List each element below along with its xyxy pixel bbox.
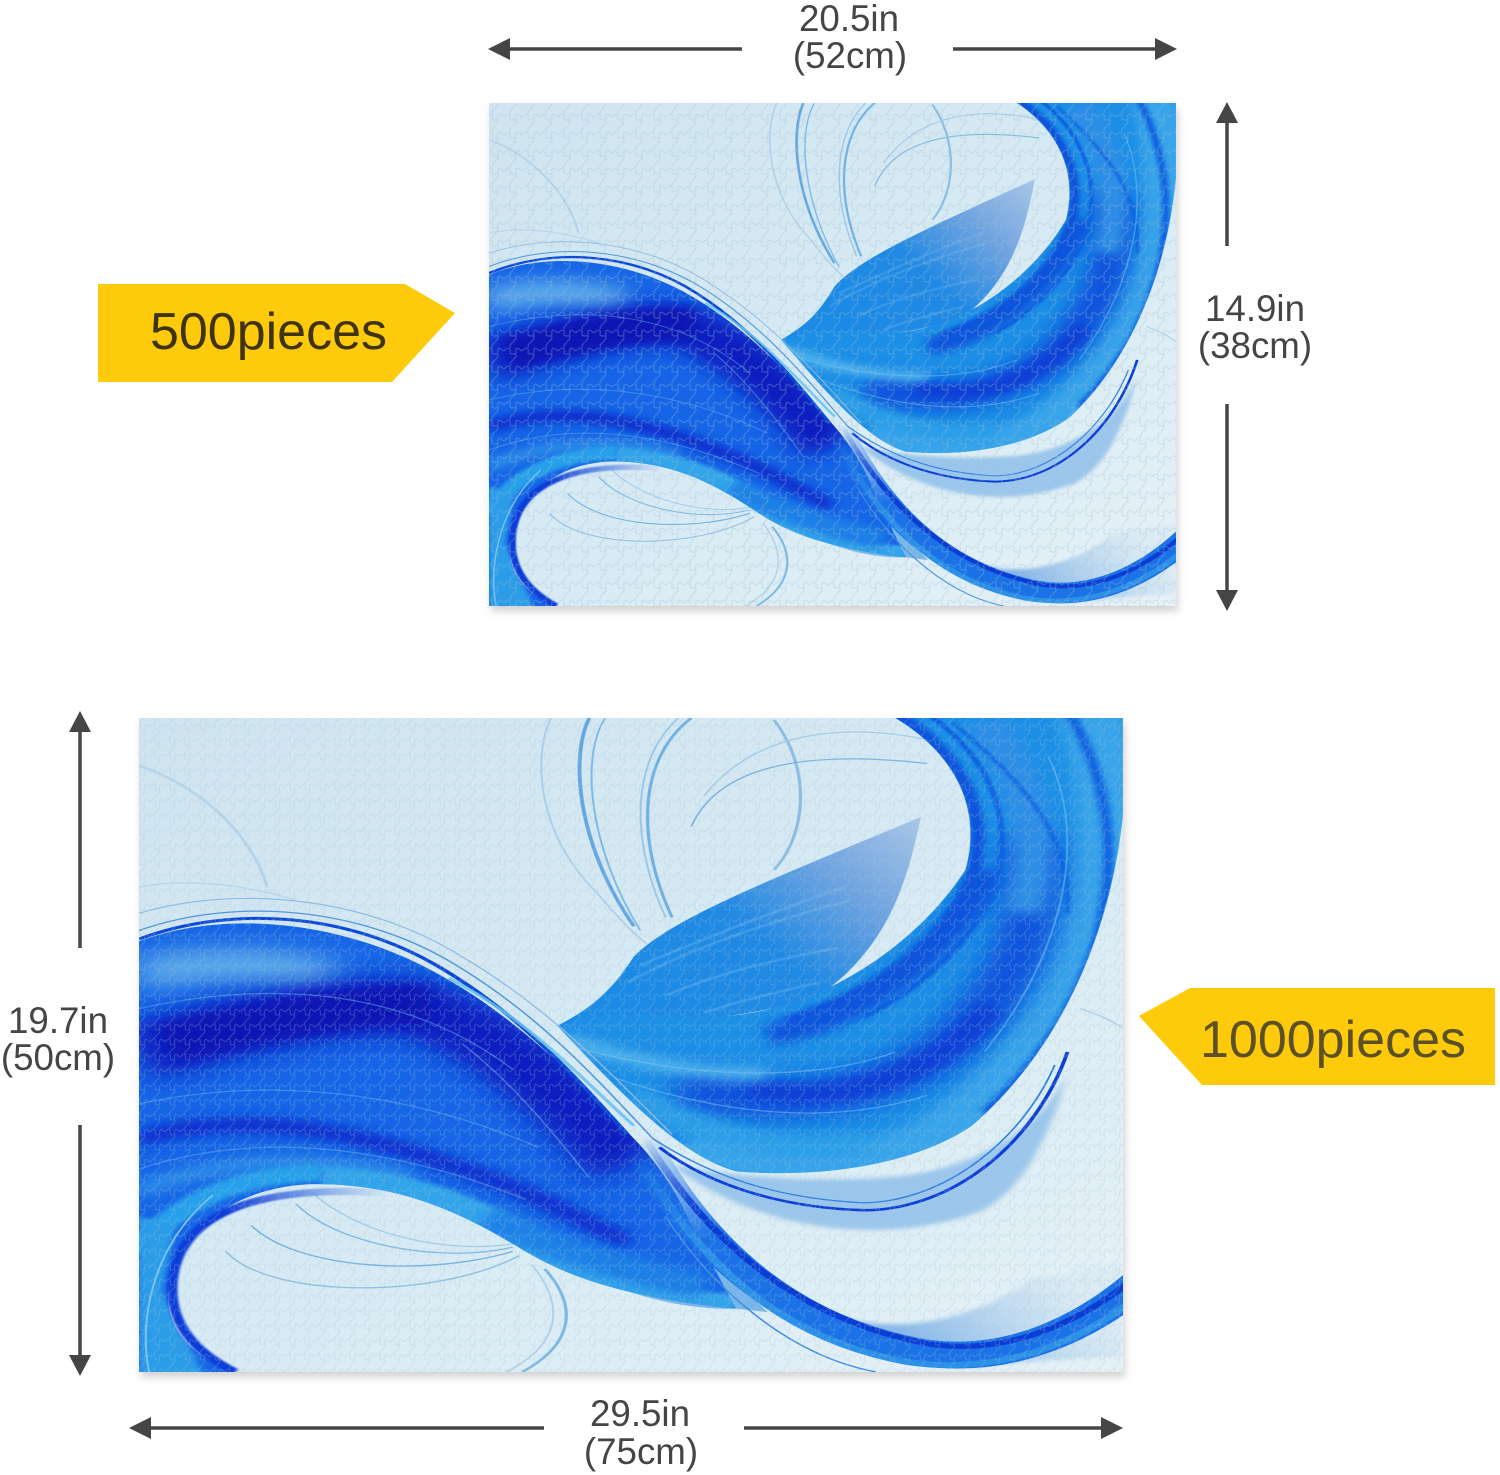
label: width: (75cm)	[584, 1431, 698, 1472]
label: height: 19.7in	[8, 1000, 108, 1041]
label: height: (50cm)	[1, 1037, 115, 1078]
width dimension: 500 piece puzzle	[488, 0, 1177, 76]
tag: 1000 pieces	[1139, 988, 1495, 1085]
label: width: 29.5in	[590, 1393, 690, 1434]
tag: 1000 pieces: 1000pieces	[1200, 1011, 1466, 1069]
arrow: left	[129, 1417, 544, 1439]
tag: 500 pieces	[98, 284, 455, 382]
arrow: down	[1216, 404, 1238, 611]
width dimension: 1000 piece puzzle	[129, 1393, 1123, 1472]
label: height: 14.9in	[1205, 288, 1305, 329]
puzzle: 1000 pieces	[130, 705, 1150, 1382]
label: width: (52cm)	[793, 35, 907, 76]
arrow: right	[744, 1417, 1123, 1439]
height dimension: 500 piece puzzle	[1198, 102, 1312, 611]
puzzle: 500 pieces	[483, 93, 1195, 613]
arrow: down	[69, 1125, 91, 1376]
height dimension: 1000 piece puzzle	[1, 711, 115, 1376]
arrow: right	[953, 38, 1177, 60]
arrow: left	[488, 38, 742, 60]
label: height: (38cm)	[1198, 325, 1312, 366]
tag: 500 pieces: 500pieces	[150, 303, 387, 361]
arrow: up	[69, 711, 91, 948]
arrow: up	[1216, 102, 1238, 246]
